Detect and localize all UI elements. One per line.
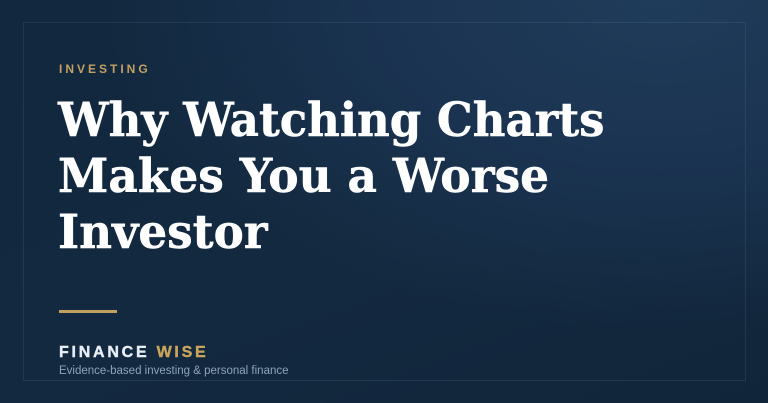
gold divider xyxy=(59,310,117,313)
title: Makes You a Worse xyxy=(58,149,549,204)
category label: INVESTING xyxy=(59,62,151,76)
title: Investor xyxy=(58,205,268,260)
tagline: Evidence-based investing & personal finance xyxy=(59,365,289,377)
brand name: FINANCE WISE xyxy=(59,344,208,361)
title: Why Watching Charts xyxy=(58,93,605,148)
title xyxy=(57,93,605,260)
